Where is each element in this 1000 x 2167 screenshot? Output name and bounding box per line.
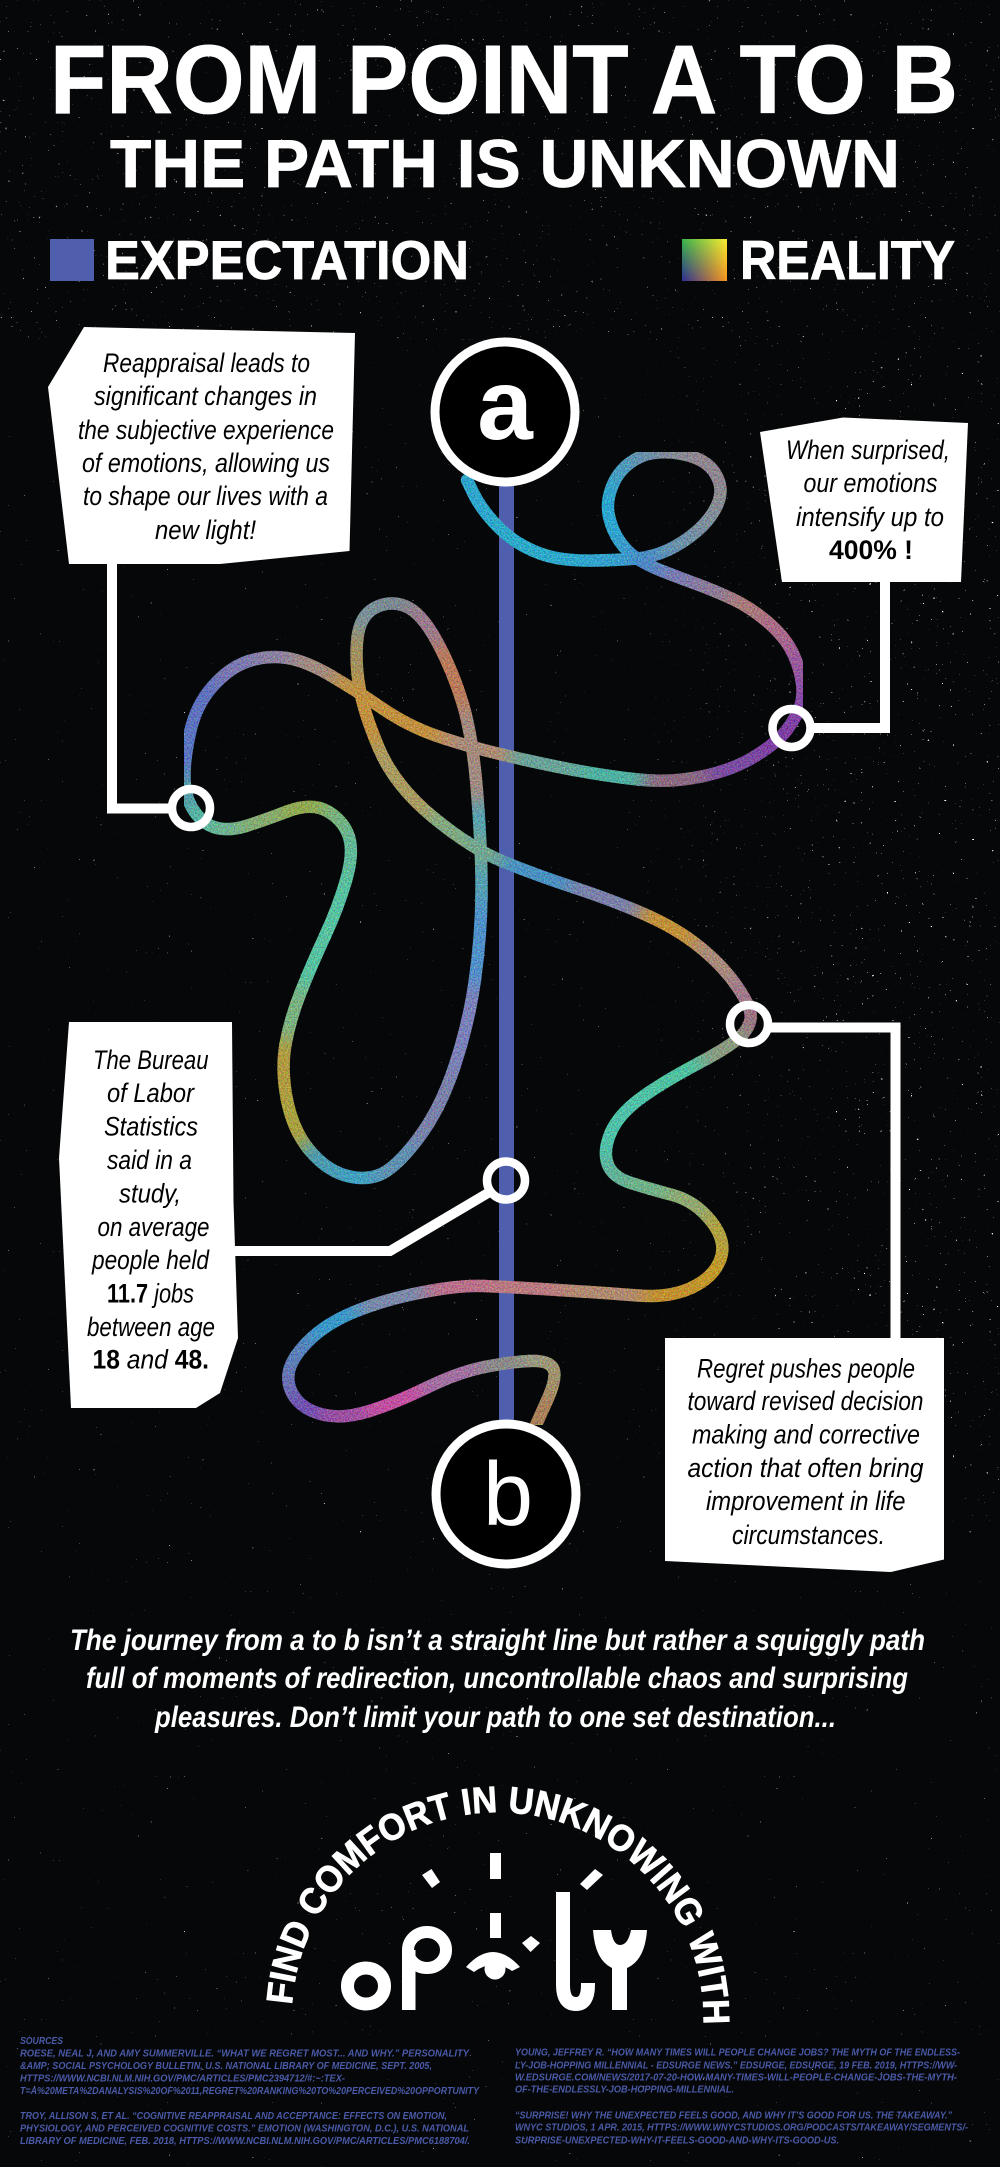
sources: left column: SOURCES bbox=[20, 2035, 63, 2047]
callout: reappraisal: Reappraisal leads to bbox=[103, 348, 310, 378]
callout: bureau of labor statistics: of Labor bbox=[107, 1078, 195, 1108]
callout: bureau of labor statistics: 11.7 jobs bbox=[107, 1278, 194, 1308]
logo sunrise eye symbol bbox=[422, 1853, 603, 1980]
marker ring: regret bbox=[730, 1005, 768, 1043]
logo letter y bbox=[593, 1930, 647, 2010]
sources: right column: OF-THE-ENDLESSLY-JOB-HOPPING-MILLENNIAL. bbox=[515, 2084, 734, 2096]
callout: bureau of labor statistics: The Bureau bbox=[93, 1045, 208, 1075]
callout: surprise bbox=[760, 418, 968, 582]
reality squiggle path bbox=[184, 452, 803, 1425]
title: FROM POINT A TO B bbox=[50, 25, 958, 134]
callout: regret: circumstances. bbox=[732, 1520, 885, 1550]
logo letter p bbox=[402, 1932, 446, 2010]
callout: bureau of labor statistics: between age bbox=[87, 1312, 215, 1342]
callout: reappraisal: to shape our lives with a bbox=[83, 481, 328, 511]
callout: surprise: 400% ! bbox=[829, 535, 913, 565]
callout: surprise: our emotions bbox=[804, 468, 938, 498]
node b bbox=[436, 1424, 576, 1564]
node b: b bbox=[483, 1445, 533, 1545]
legend: expectation: EXPECTATION bbox=[105, 229, 469, 291]
sources: left column bbox=[20, 2035, 480, 2147]
callout: reappraisal bbox=[48, 327, 355, 564]
callout: surprise: When surprised, bbox=[786, 435, 950, 465]
callout: reappraisal: new light! bbox=[155, 515, 256, 545]
closing paragraph bbox=[70, 1624, 925, 1734]
sources: right column: W.EDSURGE.COM/NEWS/2017-07-20-HOW-MANY-TIMES-WILL-PEOPLE-CHANGE-JOBS-THE-MYTH- bbox=[515, 2072, 957, 2084]
marker ring: surprise bbox=[772, 709, 810, 747]
callout: reappraisal: the subjective experience bbox=[78, 415, 334, 445]
callout: bureau of labor statistics: on average bbox=[98, 1212, 210, 1242]
node a: a bbox=[477, 349, 534, 461]
callout: bureau of labor statistics: study, bbox=[119, 1178, 181, 1208]
callout: bureau of labor statistics: people held bbox=[91, 1245, 210, 1275]
sources: left column: HTTPS://WWW.NCBI.NLM.NIH.GOV/PMC/ARTICLES/PMC2394712/#:~:TEX- bbox=[20, 2073, 345, 2085]
sources: left column: T=A%20META%2DANALYSIS%20OF%2011,REGRET%20RANKING%20TO%20PERCEIVED%20OPPORTUNITY bbox=[20, 2085, 480, 2097]
sources: left column: LIBRARY OF MEDICINE, FEB. 2018, HTTPS://WWW.NCBI.NLM.NIH.GOV/PMC/ARTICLES/PMC6188704/. bbox=[20, 2135, 470, 2147]
logo: optily bbox=[348, 1853, 647, 2010]
callout: bureau of labor statistics bbox=[59, 1022, 238, 1408]
callout: regret: improvement in life bbox=[706, 1486, 906, 1516]
node a bbox=[435, 342, 575, 482]
marker ring: bureau bbox=[487, 1162, 525, 1200]
callout: reappraisal: significant changes in bbox=[94, 381, 317, 411]
callout: regret: action that often bring bbox=[688, 1453, 924, 1483]
legend: reality bbox=[682, 239, 955, 281]
marker ring: reappraisal bbox=[172, 789, 210, 827]
sources: left column: PHYSIOLOGY, AND PERCEIVED COGNITIVE COSTS.” EMOTION (WASHINGTON, D.C.), U.S. NATIONAL bbox=[20, 2123, 469, 2135]
callout: surprise: intensify up to bbox=[796, 502, 944, 532]
connector: regret bbox=[770, 1028, 896, 1342]
closing paragraph: pleasures. Don’t limit your path to one set destination... bbox=[154, 1701, 836, 1734]
callout: reappraisal: of emotions, allowing us bbox=[82, 448, 330, 478]
callout: bureau of labor statistics: Statistics bbox=[104, 1112, 198, 1142]
legend: reality: REALITY bbox=[740, 229, 955, 291]
arched tagline: FIND COMFORT IN UNKNOWING WITH bbox=[266, 1786, 730, 2023]
connector: bureau bbox=[232, 1193, 488, 1251]
logo letter o bbox=[348, 1968, 384, 2004]
logo letter l bbox=[563, 1892, 588, 2004]
callout: regret: Regret pushes people bbox=[697, 1354, 915, 1384]
sources: right column bbox=[515, 2047, 968, 2146]
callout: regret: making and corrective bbox=[692, 1420, 920, 1450]
connector: reappraisal bbox=[112, 560, 172, 808]
callout: bureau of labor statistics: said in a bbox=[107, 1145, 192, 1175]
callout: regret bbox=[665, 1338, 944, 1572]
sources: left column: &AMP; SOCIAL PSYCHOLOGY BULLETIN, U.S. NATIONAL LIBRARY OF MEDICINE, SEPT. 2005, bbox=[20, 2060, 432, 2072]
callout: bureau of labor statistics: 18 and 48. bbox=[92, 1344, 209, 1374]
expectation line bbox=[499, 480, 514, 1425]
sources: left column: TROY, ALLISON S, ET AL. “COGNITIVE REAPPRAISAL AND ACCEPTANCE: EFFECTS ON EMOTION, bbox=[20, 2110, 447, 2122]
callout: regret: toward revised decision bbox=[688, 1386, 924, 1416]
sources: right column: SURPRISE-UNEXPECTED-WHY-IT-FEELS-GOOD-AND-WHY-ITS-GOOD-US. bbox=[515, 2134, 839, 2146]
sources: left column: ROESE, NEAL J, AND AMY SUMMERVILLE. “WHAT WE REGRET MOST... AND WHY.” PERSONALITY bbox=[20, 2048, 470, 2060]
subtitle: THE PATH IS UNKNOWN bbox=[110, 126, 900, 202]
connector: surprise bbox=[810, 578, 885, 728]
